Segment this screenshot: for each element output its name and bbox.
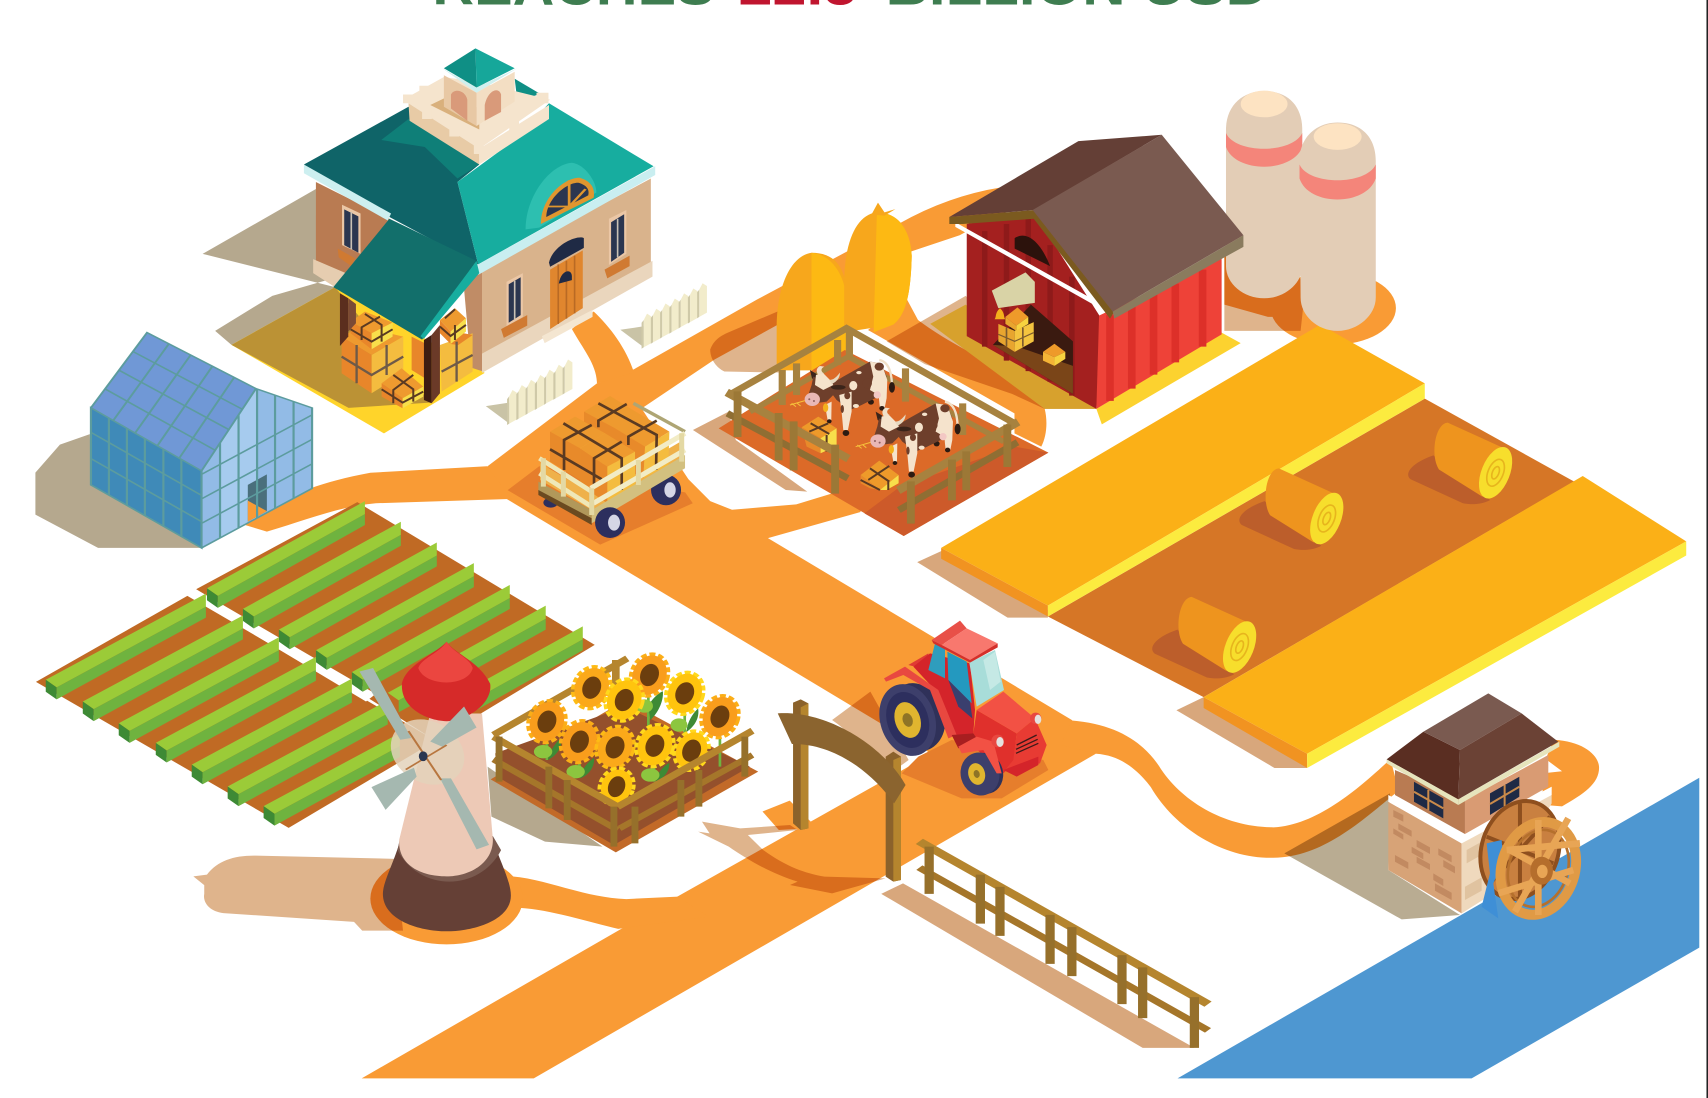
water mill	[1387, 693, 1588, 925]
house posts	[340, 293, 440, 403]
tractor cab and body	[884, 621, 1047, 777]
barn shadow across road	[887, 296, 1096, 409]
mill roof	[1387, 693, 1559, 805]
roof tower	[403, 48, 550, 165]
windmill base	[383, 836, 511, 931]
hay roll 1	[1239, 468, 1350, 550]
mill lower wall	[1388, 787, 1552, 913]
box back rails	[493, 658, 627, 735]
hay field	[941, 325, 1686, 768]
crop rows plot A	[207, 501, 583, 733]
house	[203, 48, 655, 433]
windmill cap	[402, 642, 490, 721]
fence shadow	[881, 883, 1194, 1048]
field strips shadow	[917, 550, 1048, 618]
crates	[550, 396, 669, 503]
stems and leaves	[534, 691, 720, 782]
barn	[930, 135, 1243, 424]
greenhouse roof	[91, 333, 256, 471]
windmill	[359, 642, 511, 931]
field strip shadow 2	[1176, 697, 1307, 768]
hay box in pen 2	[861, 461, 899, 490]
pen back rails	[730, 328, 1014, 442]
box soil	[491, 700, 758, 852]
gate right post	[886, 752, 901, 882]
water wheel	[1468, 791, 1588, 925]
silo shadow	[1224, 256, 1306, 331]
crop field plots	[36, 501, 595, 828]
wagon front wheel	[595, 507, 625, 538]
ranch gate	[778, 699, 906, 882]
wagon bed	[538, 433, 685, 525]
house crates	[342, 308, 473, 408]
windmill sails	[359, 668, 489, 849]
mill upper wall	[1395, 755, 1548, 834]
wagon back wheels	[543, 475, 681, 508]
picture frame edge	[1706, 0, 1708, 1098]
barn hay boxes	[998, 307, 1065, 366]
river	[1178, 778, 1699, 1078]
water mill shadow	[1284, 793, 1460, 919]
hay box in pen	[802, 417, 837, 453]
house right wall	[463, 179, 652, 373]
silos	[1226, 91, 1376, 331]
hay strip upper	[941, 325, 1425, 617]
pen front rails	[730, 394, 1014, 520]
box front rails	[493, 731, 752, 847]
cow 2	[856, 402, 961, 478]
greenhouse left wall	[91, 408, 202, 548]
house shadow	[203, 189, 335, 345]
pen ground	[719, 350, 1048, 536]
gate left post	[793, 699, 808, 830]
long fence	[881, 841, 1208, 1048]
tractor rear wheel	[870, 676, 954, 763]
cow 1	[790, 360, 895, 436]
greenhouse gable wall	[202, 389, 312, 548]
box shadow	[488, 767, 602, 847]
barn walls	[967, 212, 1222, 409]
wagon shadow	[508, 466, 693, 545]
hay strip lower	[1204, 476, 1686, 768]
house left wall	[313, 182, 389, 289]
title: cropped headline	[432, 0, 1269, 16]
pen shadow	[693, 412, 807, 492]
fence rails and posts	[919, 841, 1208, 1048]
cow pen	[693, 328, 1048, 536]
crop rows plot B	[46, 594, 400, 826]
dormer window	[526, 163, 596, 229]
haystacks	[777, 203, 912, 370]
hay roll 2	[1408, 423, 1519, 504]
greenhouse frame	[91, 333, 312, 548]
picket fence 1	[486, 360, 572, 425]
hay roll 3	[1152, 597, 1263, 678]
house roof	[304, 79, 655, 340]
house door	[542, 237, 593, 343]
tractor shadow	[902, 740, 1048, 798]
windmill shadow	[193, 856, 403, 931]
hay shadow	[710, 310, 780, 373]
greenhouse	[35, 333, 312, 548]
greenhouse door	[248, 474, 267, 522]
sunflowers	[525, 652, 742, 807]
tractor front fender and lights	[958, 713, 1041, 773]
greenhouse shadow	[35, 434, 202, 548]
hay wagon	[538, 396, 685, 538]
sunflower box	[488, 652, 758, 852]
gate arch	[778, 713, 906, 803]
tractor	[870, 621, 1048, 800]
barn roof	[949, 135, 1243, 319]
windmill tower	[399, 714, 493, 876]
picket fence 2	[620, 283, 707, 349]
gate shadow	[698, 692, 909, 893]
barn ground	[930, 305, 1241, 424]
road network	[245, 187, 1599, 1078]
house ground	[231, 287, 485, 433]
wagon back rail and load floor	[540, 403, 685, 510]
tractor front wheel	[956, 748, 1008, 800]
